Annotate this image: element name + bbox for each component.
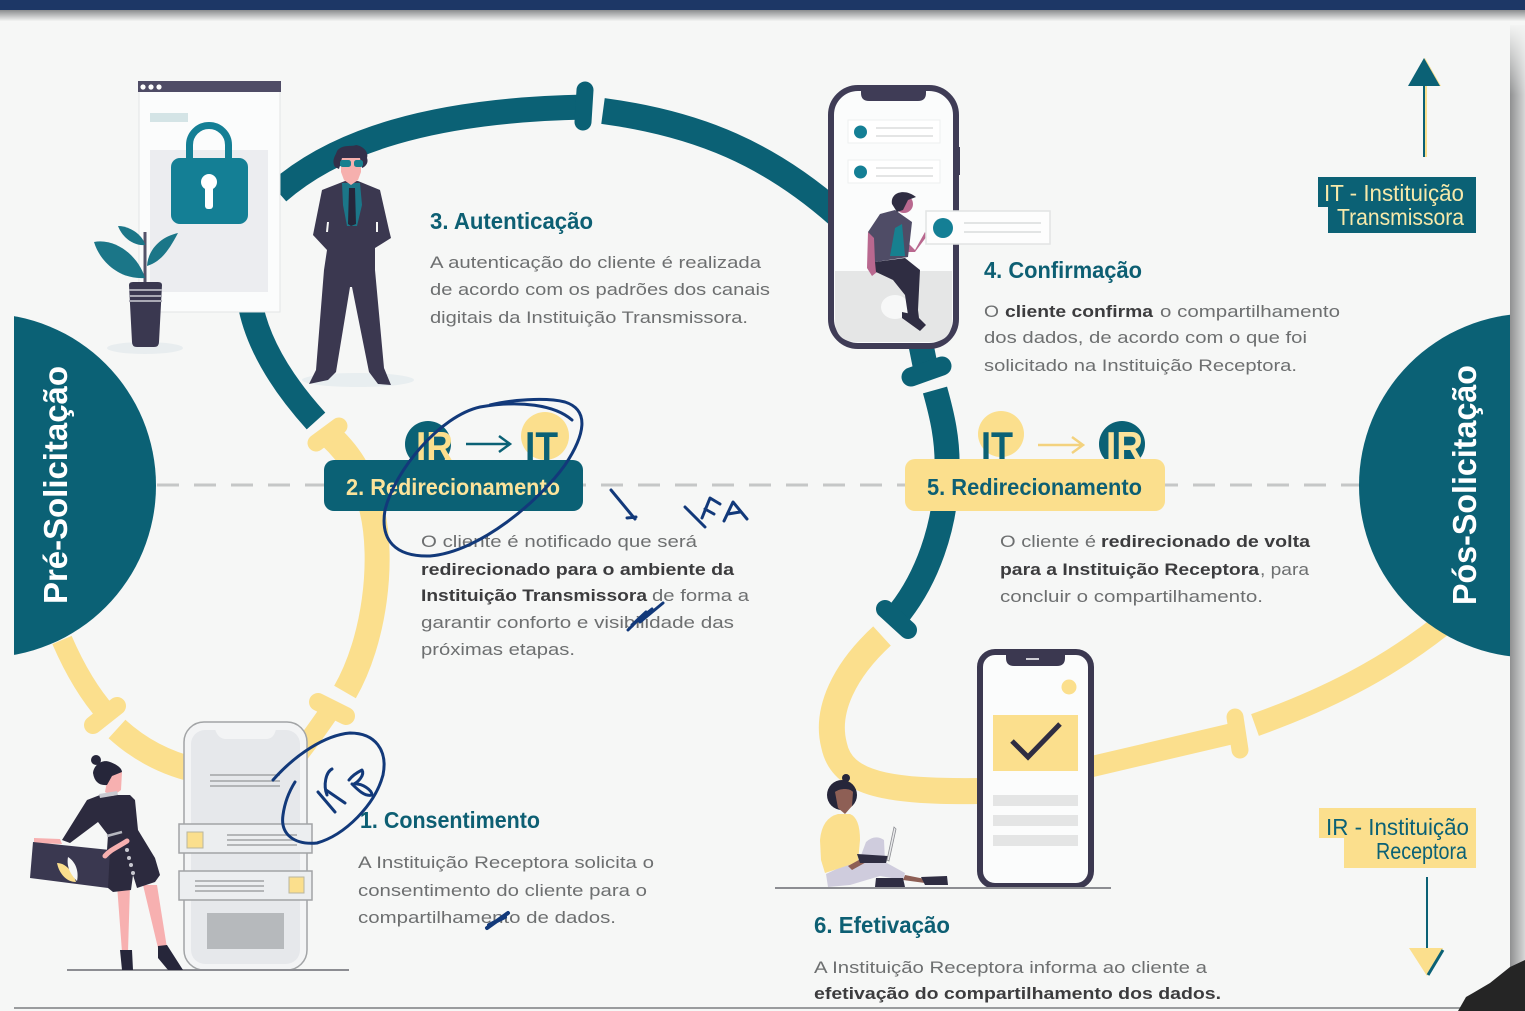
illustration: phone with seated man <box>831 88 960 346</box>
step 5 heading box: 5. Redirecionamento <box>927 474 1142 500</box>
step 5 heading box <box>905 459 1165 511</box>
badge flow: IR to IT (step 2): IT <box>525 423 558 470</box>
step 3 text: de acordo com os padrões dos canais <box>430 280 770 299</box>
badge flow: IR to IT (step 2): IR <box>416 423 453 470</box>
illustration: man in suit <box>302 145 414 387</box>
legend: IR - Instituição Receptora: IR - Instituição <box>1326 814 1469 840</box>
legend: IT - Instituição Transmissora: IT - Instituição <box>1324 180 1464 206</box>
teal journey ring <box>251 90 947 630</box>
panel: pré-solicitação circle <box>14 316 156 655</box>
step 4 text: dos dados, de acordo com o que foi <box>984 328 1307 347</box>
annotation: number scribble <box>628 603 663 630</box>
icon: padlock <box>171 126 248 224</box>
step 1 text: compartilhamento de dados. <box>358 908 616 927</box>
panel: pós-solicitação circle <box>1359 314 1525 658</box>
step 4 text: solicitado na Instituição Receptora. <box>984 356 1297 375</box>
step 5 text: para a Instituição Receptora <box>1000 560 1260 579</box>
illustration: woman holding box <box>30 755 349 970</box>
step 3 text: digitais da Instituição Transmissora. <box>430 308 748 327</box>
handwritten annotations <box>273 399 747 928</box>
legend: IR - Instituição Receptora: Receptora <box>1376 838 1467 864</box>
badge flow: IT to IR (step 5): IR <box>1106 423 1143 470</box>
step 2 text: garantir conforto e visibilidade das <box>421 613 734 632</box>
step 1 heading: 1. Consentimento <box>360 807 540 833</box>
step 4 text: o compartilhamento <box>1160 302 1340 321</box>
icon: check mark <box>1012 724 1060 757</box>
dashed divider <box>157 484 1360 486</box>
legend: IT - Instituição Transmissora <box>1318 177 1476 233</box>
legend: IT - Instituição Transmissora: Transmissora <box>1337 204 1464 230</box>
step 6 text: efetivação do compartilhamento dos dados. <box>814 984 1221 1003</box>
step 2 text: próximas etapas. <box>421 640 575 659</box>
badge flow: IT to IR (step 5): IT <box>981 423 1013 470</box>
step 2 text: Instituição Transmissora <box>421 586 648 605</box>
step 3 text <box>430 253 770 327</box>
step 5 text: redirecionado de volta <box>1101 532 1311 551</box>
step 2 text: O cliente é notificado que será <box>421 532 698 551</box>
annotation: IFB loop <box>273 733 384 843</box>
step 5 text <box>1000 532 1311 606</box>
illustration: browser window with padlock <box>138 81 281 312</box>
label: pós-solicitação: Pós-Solicitação <box>1446 365 1483 605</box>
step 4 heading: 4. Confirmação <box>984 257 1142 283</box>
seated man figure <box>867 192 927 331</box>
legend: IR - Instituição Receptora <box>1319 808 1476 868</box>
step 2 heading box <box>324 460 583 511</box>
annotation: arrow and IFA <box>611 490 747 527</box>
yellow journey ring <box>62 426 1442 791</box>
presenter silhouette corner <box>1458 960 1525 1011</box>
step 4 text: O <box>984 302 999 321</box>
step 3 heading: 3. Autenticação <box>430 208 593 234</box>
badge flow: IT to IR (step 5) <box>978 411 1145 470</box>
annotation: text scribble <box>487 913 508 928</box>
annotation: IFB letters <box>318 769 372 812</box>
badge flow: IR to IT (step 2) <box>405 412 569 470</box>
illustration: confirmation phone <box>980 652 1091 886</box>
step 4 text: cliente confirma <box>1005 302 1154 321</box>
arrow up: towards IT <box>1408 58 1441 157</box>
annotation: ellipse around redirect <box>384 399 582 556</box>
step 1 text <box>358 853 654 927</box>
step 4 text <box>984 302 1340 375</box>
illustration: potted plant <box>94 226 183 354</box>
label: pré-solicitação: Pré-Solicitação <box>37 366 74 604</box>
step 1 text: A Instituição Receptora solicita o <box>358 853 654 872</box>
step 5 text: O cliente é <box>1000 532 1096 551</box>
step 6 heading: 6. Efetivação <box>814 912 950 938</box>
step 2 text <box>421 532 750 659</box>
illustration: seated woman with laptop <box>775 774 1111 888</box>
step 6 text <box>814 958 1221 1003</box>
step 1 text: consentimento do cliente para o <box>358 881 647 900</box>
step 3 text: A autenticação do cliente é realizada <box>430 253 762 272</box>
step 2 text: redirecionado para o ambiente da <box>421 560 735 579</box>
illustration: consent phone <box>179 722 312 970</box>
step 2 text: de forma a <box>652 586 750 605</box>
step 5 text: concluir o compartilhamento. <box>1000 587 1263 606</box>
floating confirmation card <box>926 211 1050 244</box>
step 2 heading box: 2. Redirecionamento <box>346 474 560 500</box>
top navy bar <box>0 0 1525 21</box>
arrow down: towards IR <box>1409 877 1443 976</box>
step 5 text: , para <box>1260 560 1310 579</box>
step 6 text: A Instituição Receptora informa ao cliente a <box>814 958 1208 977</box>
